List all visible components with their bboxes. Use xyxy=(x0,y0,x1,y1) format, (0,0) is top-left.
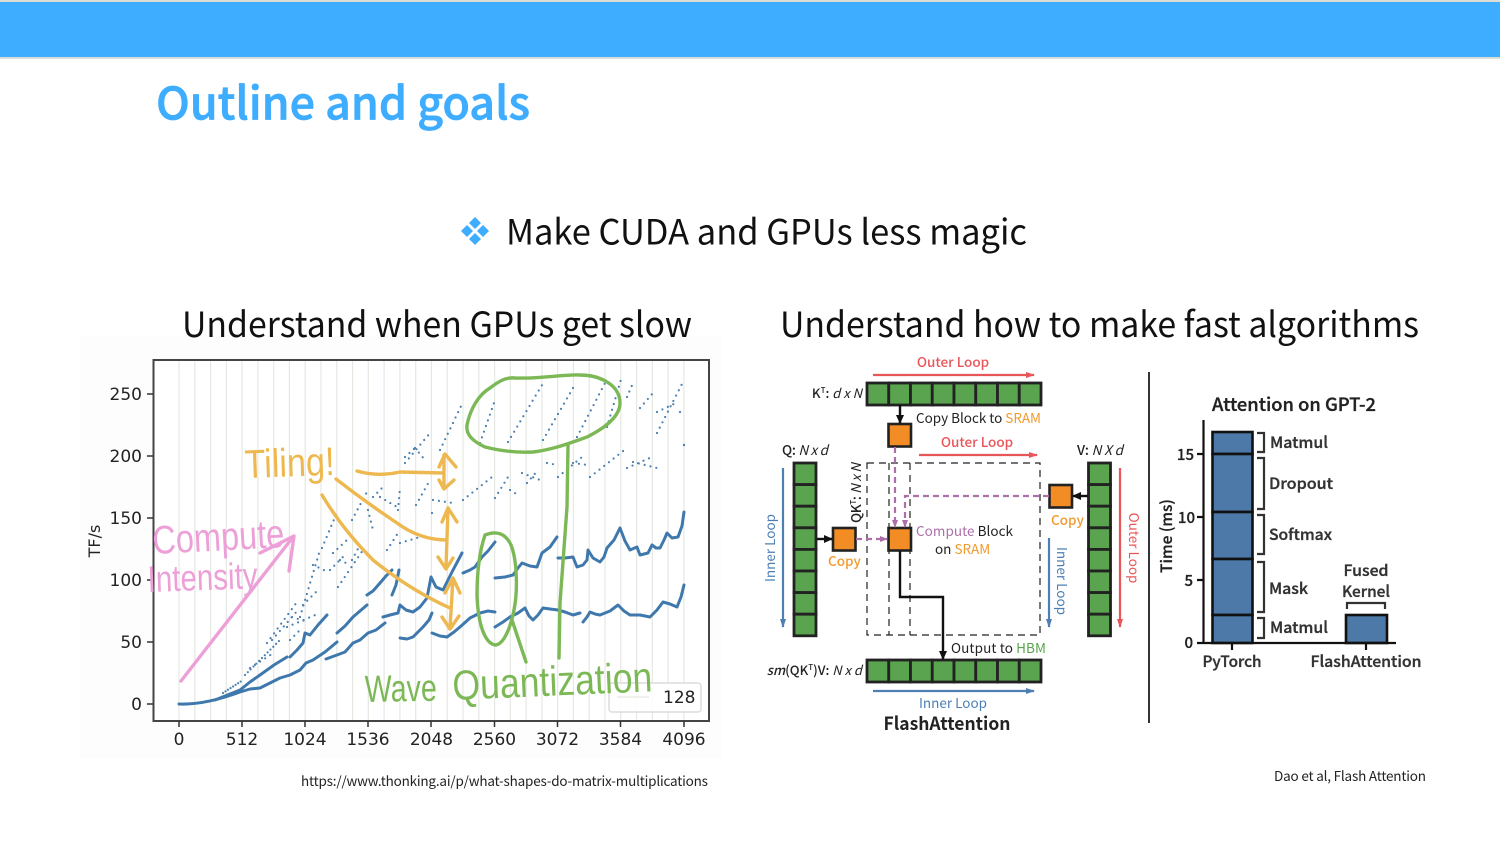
left heading: Understand when GPUs get slow xyxy=(182,297,692,348)
orange SRAM blocks xyxy=(833,424,1072,550)
diagram labels: Inner Loop xyxy=(1053,547,1073,615)
diagram labels: N x d xyxy=(829,660,864,679)
axes xyxy=(1197,420,1396,650)
green ellipse: upper xyxy=(467,375,620,452)
diagram labels: T xyxy=(808,662,813,673)
diagram labels: sm(QK xyxy=(767,660,808,679)
annotation: compute intensity: Intensity xyxy=(147,555,259,600)
axis tick labels: 5 xyxy=(1184,570,1193,591)
series lines xyxy=(179,512,684,704)
column: V xyxy=(1088,463,1110,636)
y axis ticks and labels: 250 xyxy=(110,385,142,405)
tiling pointers xyxy=(322,471,450,608)
diagram labels: Compute Block xyxy=(916,520,1014,540)
row: K transpose xyxy=(867,383,1041,405)
x axis ticks and labels: 4096 xyxy=(662,730,706,750)
diagram labels: Output to HBM xyxy=(951,637,1046,657)
annotation: wave quantization: Quantization xyxy=(451,653,653,709)
segment labels: Kernel xyxy=(1342,580,1390,602)
segment brackets xyxy=(1257,433,1385,638)
green line: connector xyxy=(559,445,568,658)
black data flow arrows xyxy=(817,405,1088,659)
double arrows xyxy=(438,454,460,629)
panel: Attention on GPT-2 bar chart xyxy=(1155,391,1422,672)
source citation right: Dao et al, Flash Attention xyxy=(1274,765,1426,785)
annotation: tiling: Tiling! xyxy=(244,440,335,487)
chart title: Attention on GPT-2 xyxy=(1212,391,1376,417)
x axis ticks and labels: 3072 xyxy=(536,730,579,750)
axis tick labels: 15 xyxy=(1177,444,1194,465)
annotation: wave quantization: Wave xyxy=(364,668,437,711)
loop arrows xyxy=(783,375,1120,691)
dashed purple data flow arrows xyxy=(856,447,1049,539)
segment labels: PyTorch xyxy=(1202,650,1262,672)
x axis ticks and labels xyxy=(174,721,706,750)
diagram caption: FlashAttention xyxy=(884,710,1010,736)
bullet point xyxy=(461,204,1027,256)
x axis ticks and labels: 512 xyxy=(226,730,258,750)
diagram labels: V: N X d xyxy=(1076,439,1125,459)
diagram labels: )V: xyxy=(813,660,829,679)
diagram labels: Copy Block to SRAM xyxy=(916,407,1041,427)
PyTorch stacked bar xyxy=(1212,432,1252,643)
diagram labels: T xyxy=(821,385,826,396)
green ellipse: lower xyxy=(477,533,526,662)
annotation: tiling xyxy=(244,440,460,629)
legend xyxy=(609,683,701,712)
x axis ticks and labels: 2048 xyxy=(410,730,453,750)
annotation: compute intensity xyxy=(147,512,294,681)
diagram labels: N x N xyxy=(845,462,865,496)
diagram labels: T xyxy=(848,500,859,505)
x axis ticks and labels: 1024 xyxy=(283,730,327,750)
diagram labels: on SRAM xyxy=(935,538,990,558)
FlashAttention bar xyxy=(1346,615,1387,643)
axis tick labels: 0 xyxy=(1184,632,1193,653)
diagram labels: d x N xyxy=(829,383,864,402)
y axis ticks and labels: 150 xyxy=(110,509,142,529)
column: Q xyxy=(794,463,816,636)
y axis label: TF/s xyxy=(85,525,104,558)
axes frame xyxy=(154,360,709,721)
x axis ticks and labels: 2560 xyxy=(473,730,516,750)
diagram labels: : xyxy=(845,496,865,500)
title: Outline and goals xyxy=(156,68,530,132)
diagram labels: QK xyxy=(845,504,865,523)
segment labels: FlashAttention xyxy=(1310,650,1422,672)
diagram labels: K xyxy=(812,383,821,402)
scatter dots xyxy=(223,376,685,693)
diagram labels xyxy=(759,351,1145,712)
segment labels: Matmul xyxy=(1270,616,1328,638)
y axis ticks and labels: 100 xyxy=(110,571,142,591)
legend: 128 xyxy=(663,688,695,708)
segment labels: Matmul xyxy=(1270,431,1328,453)
source link left: https://www.thonking.ai/p/what-shapes-do-matrix-multiplications xyxy=(301,770,708,790)
segment labels: Dropout xyxy=(1269,472,1333,494)
diagram labels: Inner Loop xyxy=(919,692,987,712)
y axis ticks and labels: 0 xyxy=(131,695,142,715)
diagram labels: Outer Loop xyxy=(1125,513,1145,583)
diagram labels: Outer Loop xyxy=(941,431,1013,451)
y axis ticks and labels: 200 xyxy=(110,447,142,467)
x axis ticks and labels: 0 xyxy=(174,730,184,750)
icon: four diamonds bullet xyxy=(461,217,489,245)
vertical divider xyxy=(1148,372,1150,723)
diagram labels: Copy xyxy=(1051,509,1084,529)
segment labels: Fused xyxy=(1344,559,1388,581)
axis tick labels: 10 xyxy=(1178,507,1195,528)
y axis ticks and labels: 50 xyxy=(120,633,142,653)
header band xyxy=(0,0,1500,59)
diagram labels: Inner Loop xyxy=(759,514,779,582)
right heading: Understand how to make fast algorithms xyxy=(780,297,1419,348)
segment labels: Mask xyxy=(1269,577,1308,599)
diagram labels: : xyxy=(825,383,829,402)
segment labels: Softmax xyxy=(1269,523,1332,545)
x axis ticks and labels: 3584 xyxy=(599,730,642,750)
arrow: pink rising xyxy=(181,536,294,681)
annotation: compute intensity: Compute xyxy=(151,512,285,563)
dashed QK box xyxy=(867,463,1040,635)
diagram labels: Copy xyxy=(828,550,861,570)
annotation: wave quantization xyxy=(364,375,653,711)
y axis ticks and labels xyxy=(110,385,153,715)
axis tick labels xyxy=(1177,444,1195,653)
bullet text: Make CUDA and GPUs less magic xyxy=(506,204,1027,256)
segment labels xyxy=(1202,431,1422,672)
row: output xyxy=(867,660,1041,682)
diagram labels: Outer Loop xyxy=(917,351,989,371)
y axis title: Time (ms) xyxy=(1155,499,1177,573)
panel: annotated scatter chart xyxy=(80,335,722,758)
x axis ticks and labels: 1536 xyxy=(346,730,390,750)
panel: FlashAttention diagram xyxy=(759,351,1145,736)
diagram labels: Q: N x d xyxy=(782,439,830,459)
